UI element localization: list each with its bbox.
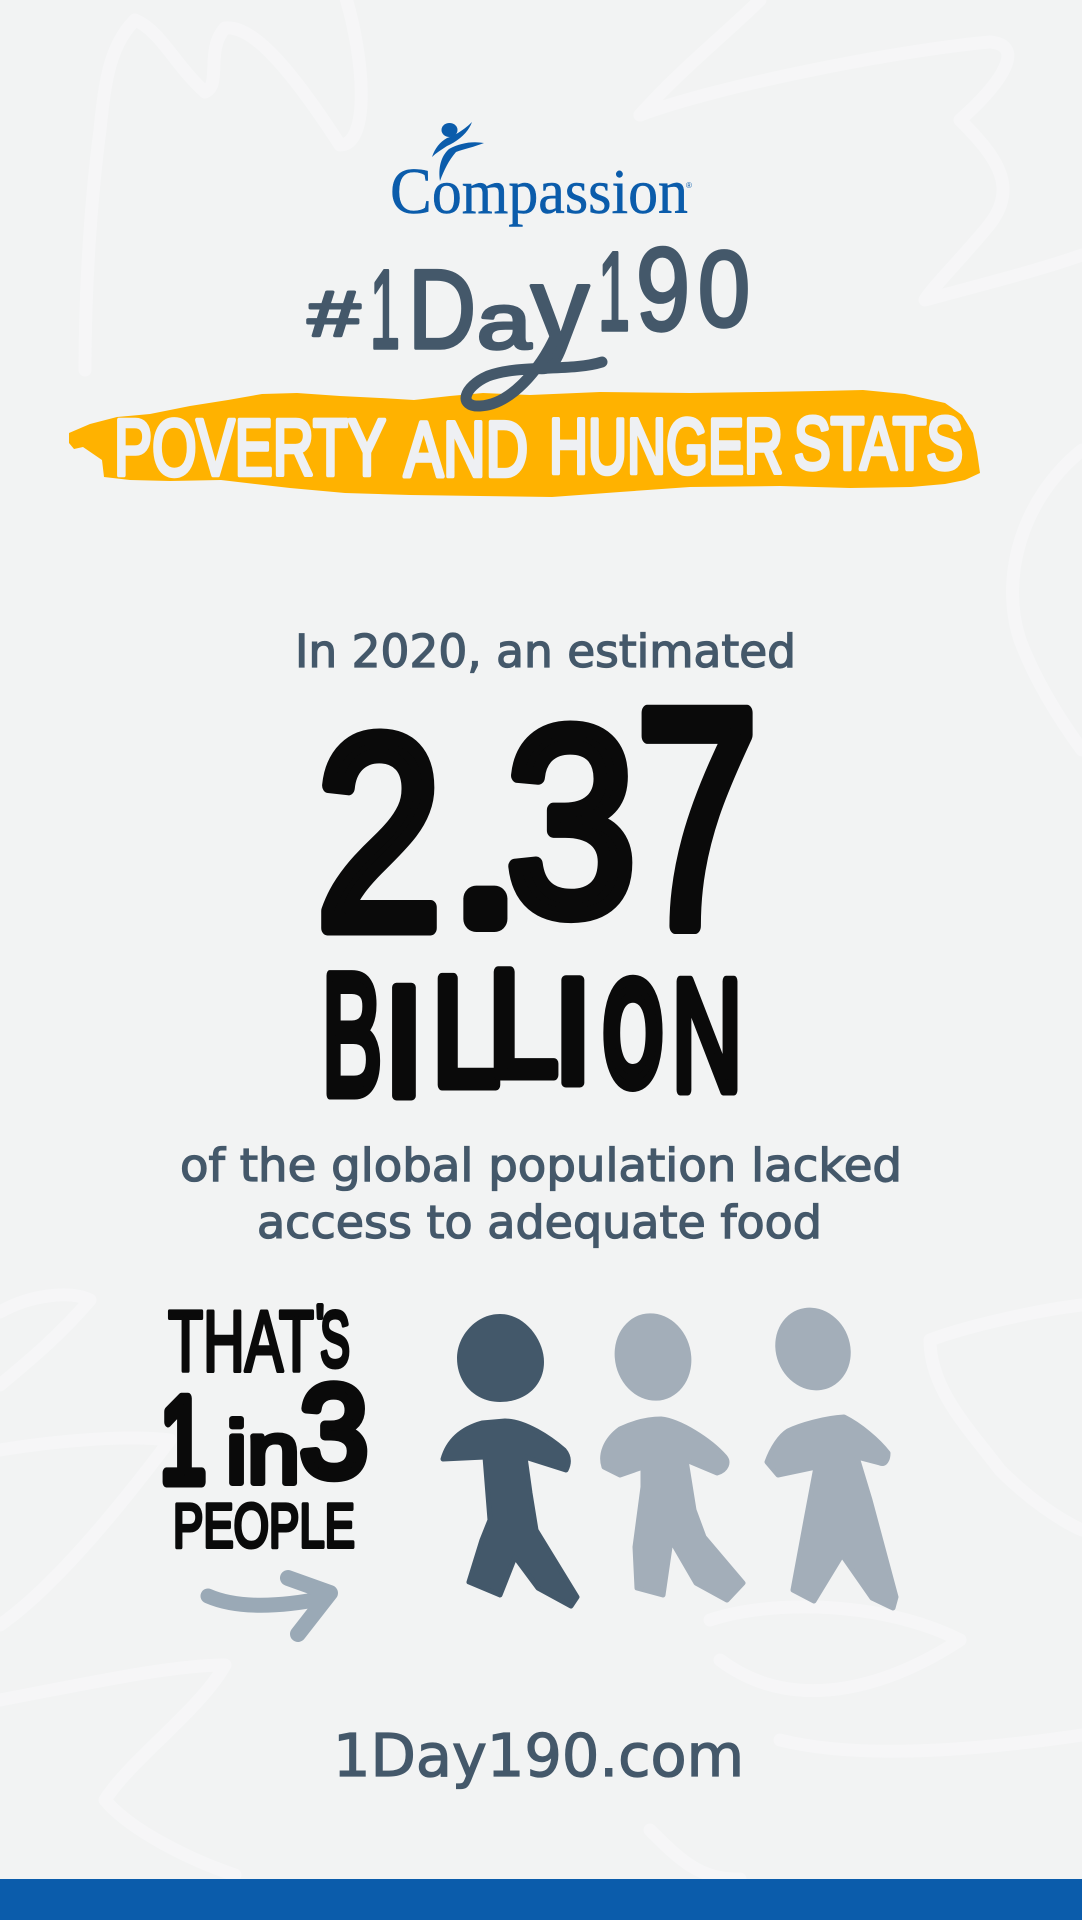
person: grey 1 (603, 1305, 743, 1600)
big number: 2.37: 7 (636, 645, 758, 992)
logo: Compassion (390, 122, 692, 228)
big label: BILLION: N (672, 948, 742, 1124)
person: grey 2 (763, 1296, 896, 1608)
arrow (208, 1578, 330, 1634)
banner heading: Poverty and Hunger Stats: STATS (794, 402, 963, 485)
callout: That's 1 in 3 people: 1 (160, 1372, 206, 1508)
text: description (180, 1139, 902, 1249)
text: description: access to adequate food (257, 1196, 822, 1249)
big number: 2.37: . (459, 748, 512, 960)
big label: BILLION: I (552, 947, 594, 1115)
callout: That's 1 in 3 people: in (226, 1403, 300, 1502)
people: 1 in 3 figures (443, 1296, 896, 1608)
icon: Compassion figure (432, 122, 484, 181)
heading: #1Day190: D (408, 247, 476, 372)
text: intro line: In 2020, an estimated (295, 625, 796, 678)
banner heading: Poverty and Hunger Stats: AND (404, 405, 528, 493)
heading: #1Day190: 1 (598, 229, 630, 354)
callout: That's 1 in 3 people: 3 (300, 1358, 368, 1504)
logo wordmark: Compassion (390, 155, 688, 228)
big label: BILLION: B (322, 939, 382, 1131)
heading: #1Day190: 1 (370, 247, 400, 372)
big number: 2.37 (316, 645, 758, 992)
big number: 2.37: 3 (506, 674, 636, 970)
big label: BILLION (322, 939, 742, 1131)
heading: #1Day190: # (308, 278, 361, 350)
callout: That's 1 in 3 people: THAT (168, 1294, 314, 1390)
big label: BILLION: L (488, 939, 558, 1107)
callout: That's 1 in 3 people: S (320, 1295, 350, 1383)
banner heading: Poverty and Hunger Stats: HUNGER (549, 402, 783, 490)
big label: BILLION: I (382, 954, 426, 1130)
banner: yellow brush stroke (69, 390, 980, 497)
heading: #1Day190: a (477, 277, 532, 365)
heading: #1Day190: 0 (698, 228, 750, 349)
callout: That's 1 in 3 people: ' (316, 1293, 324, 1356)
heading: #1Day190: y (531, 242, 589, 374)
heading: #1Day190: 9 (636, 224, 690, 356)
swash of the y (466, 335, 602, 406)
person: highlighted (443, 1314, 577, 1606)
banner heading: Poverty and Hunger Stats (114, 402, 963, 493)
text: website: 1Day190.com (333, 1721, 744, 1790)
banner heading: Poverty and Hunger Stats: POVERTY (114, 403, 386, 492)
callout: That's 1 in 3 people (160, 1293, 368, 1561)
big number: 2.37: 2 (316, 680, 442, 987)
callout: That's 1 in 3 people: PEOPLE (173, 1492, 355, 1561)
footer bar (0, 1879, 1082, 1920)
text: description: of the global population lacked (180, 1139, 902, 1192)
registered mark: ® (686, 181, 692, 190)
big label: BILLION: L (432, 945, 500, 1118)
heading: #1Day190 (308, 224, 750, 406)
big label: BILLION: O (603, 949, 663, 1117)
